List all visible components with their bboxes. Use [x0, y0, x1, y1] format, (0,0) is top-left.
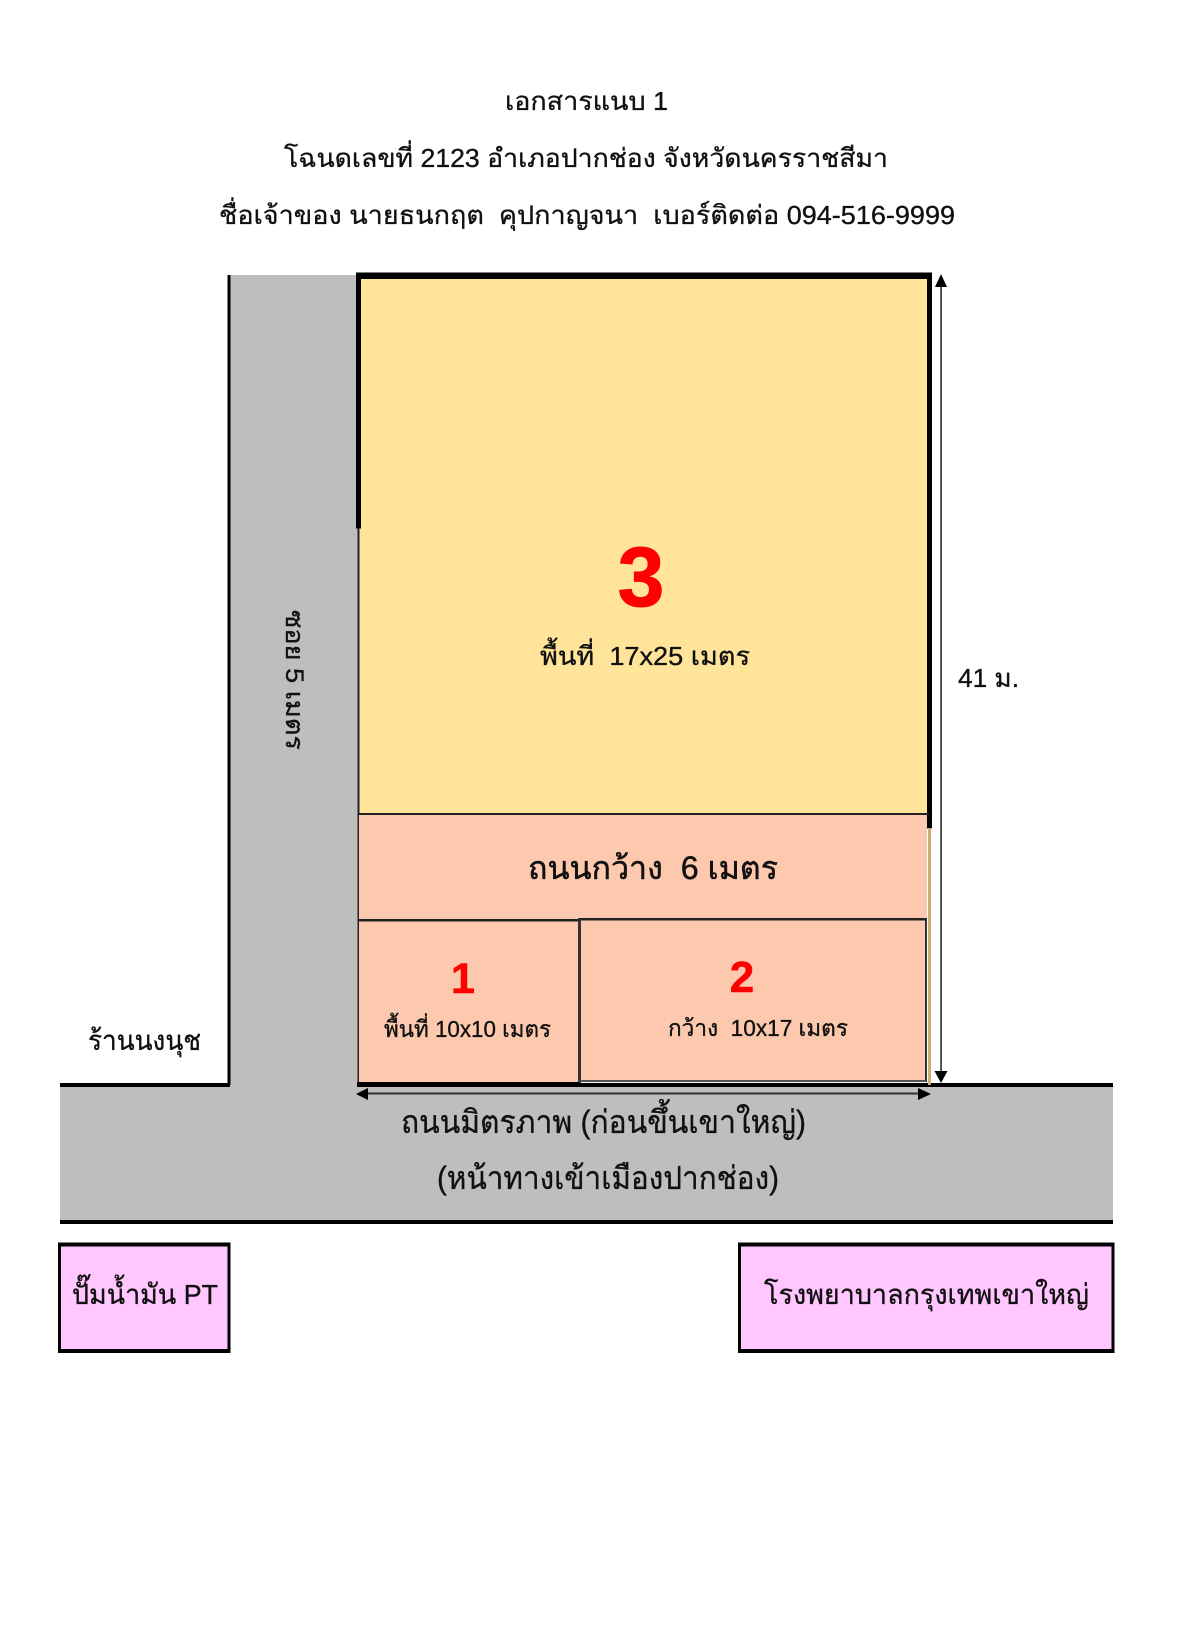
plot 2 — [578, 918, 927, 1083]
plot 1 number: 1 — [451, 955, 475, 1003]
title line 3: owner and phone: ชื่อเจ้าของ นายธนกฤต คุปกาญจนา เบอร์ติดต่อ 094-516-9999 — [219, 197, 955, 231]
bottom edge of plots — [357, 1082, 579, 1085]
plot 3: yellow land parcel — [356, 272, 932, 1085]
internal road: 6 metres wide — [358, 813, 931, 1085]
main road label line 2: (หน้าทางเข้าเมืองปากช่อง) — [437, 1160, 779, 1196]
plot 1 — [358, 919, 580, 1083]
internal road label: ถนนกว้าง 6 เมตร — [528, 850, 778, 886]
side road: soi 5 metres — [228, 275, 359, 1085]
dimension label: 41 ม. — [958, 663, 1019, 693]
main road: Mittraphap — [60, 1083, 1113, 1224]
title line 2: deed and location: โฉนดเลขที่ 2123 อำเภอปากช่อง จังหวัดนครราชสีมา — [284, 140, 888, 173]
plot 2 number: 2 — [730, 953, 754, 1002]
plot 1 area: พื้นที่ 10x10 เมตร — [384, 1013, 551, 1042]
arrow: horizontal frontage dimension — [356, 1088, 931, 1100]
plot 3 area: พื้นที่ 17x25 เมตร — [540, 637, 750, 671]
petrol station label: ปั๊มน้ำมัน PT — [72, 1274, 218, 1310]
main road label line 1: ถนนมิตรภาพ (ก่อนขึ้นเขาใหญ่) — [401, 1099, 806, 1140]
title line 1: เอกสารแนบ 1 — [505, 86, 668, 116]
title block — [219, 86, 955, 231]
hospital label: โรงพยาบาลกรุงเทพเขาใหญ่ — [764, 1278, 1089, 1312]
side road label: ซอย 5 เมตร — [280, 610, 308, 750]
label: Nong Nut shop: ร้านนงนุช — [88, 1025, 201, 1058]
landmark: Bangkok Hospital Khao Yai — [738, 1242, 1114, 1353]
plot 2 dimensions: กว้าง 10x17 เมตร — [668, 1015, 848, 1041]
arrow: 41 m vertical dimension — [934, 274, 1019, 1083]
plot 3 number: 3 — [618, 530, 664, 624]
landmark: PT petrol station — [58, 1242, 230, 1353]
